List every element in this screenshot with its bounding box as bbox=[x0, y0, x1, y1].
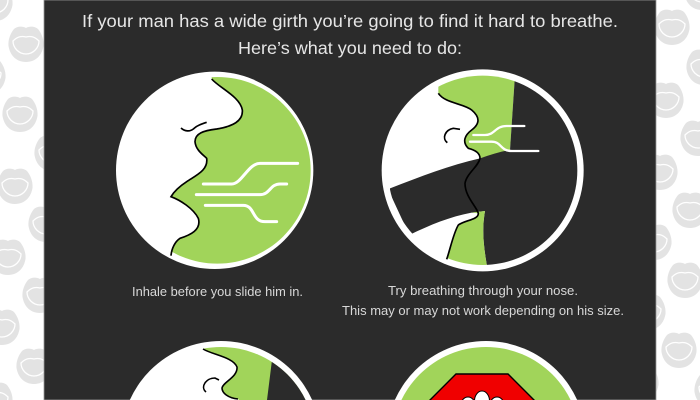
icon: inhale profile circle bbox=[116, 72, 314, 269]
icon: stop sign circle bbox=[386, 341, 586, 400]
heading: intro text: Here’s what you need to do: bbox=[238, 38, 462, 58]
icon: third profile circle bbox=[130, 341, 312, 400]
heading: intro text: If your man has a wide girth you’re going to find it hard to breathe. bbox=[82, 11, 618, 31]
caption: inhale: Inhale before you slide him in. bbox=[132, 285, 303, 299]
icon: nose breathing circle bbox=[382, 69, 584, 272]
caption: nose breathing: This may or may not work depending on his size. bbox=[342, 304, 624, 318]
icon: hand fingers bbox=[461, 391, 504, 400]
caption: nose breathing: Try breathing through your nose. bbox=[388, 284, 578, 298]
heading: intro text bbox=[82, 11, 618, 58]
caption: nose breathing bbox=[342, 284, 624, 318]
icon: red octagon bbox=[429, 373, 535, 400]
